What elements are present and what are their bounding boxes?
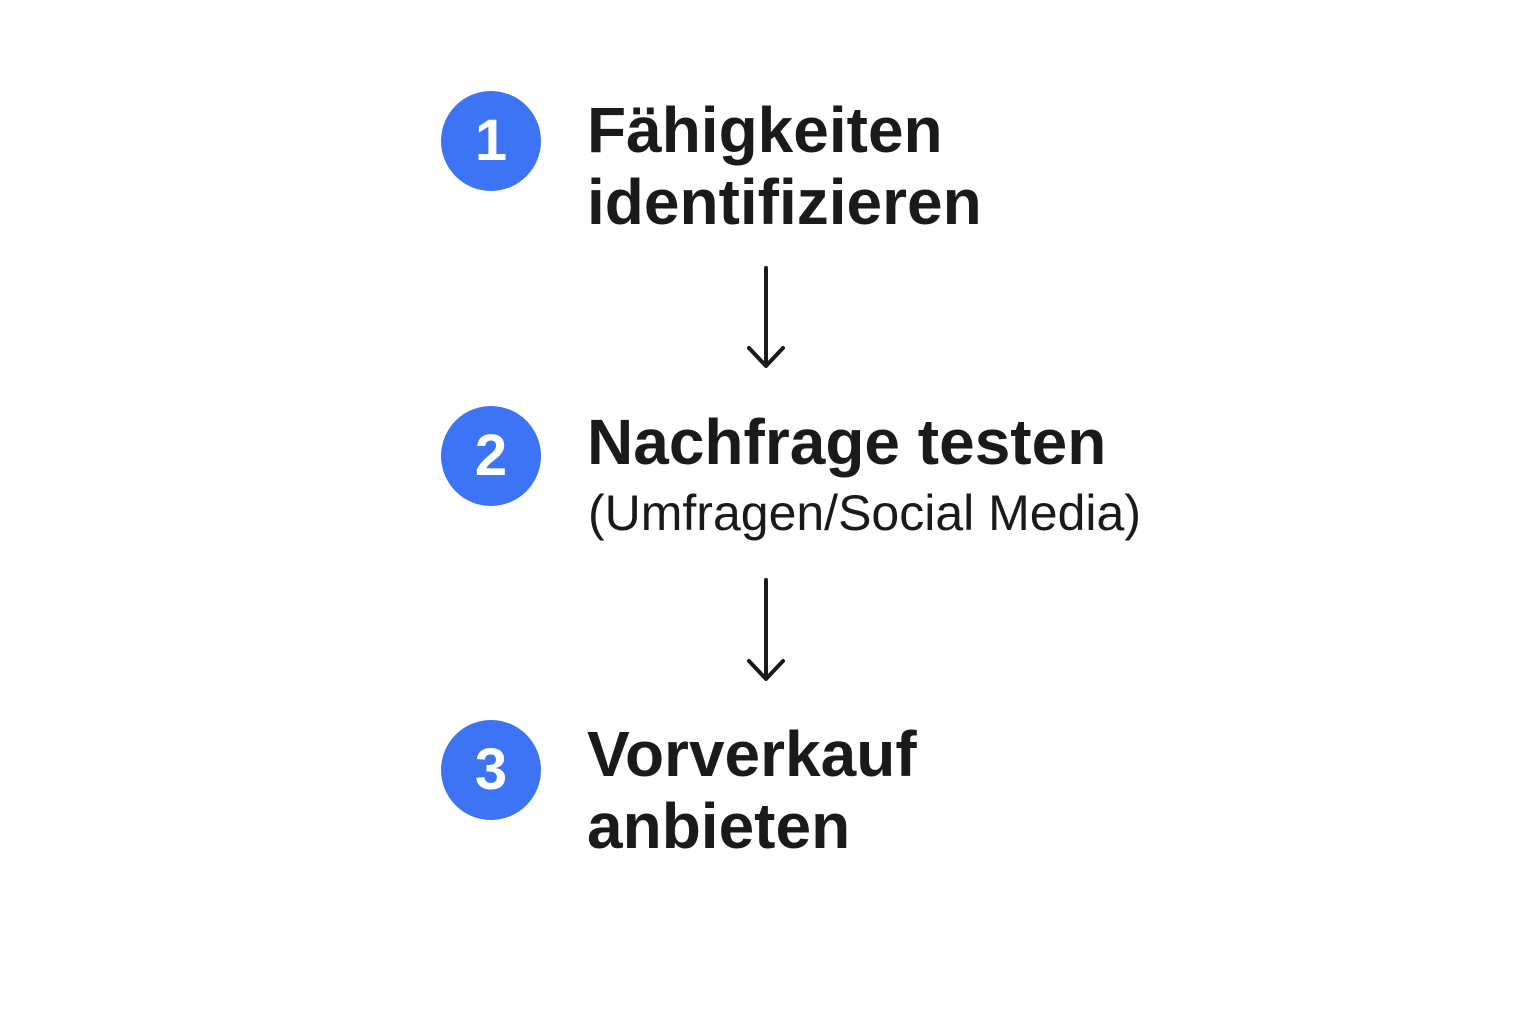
circle 3: 3 bbox=[475, 737, 507, 802]
circle 1 bbox=[441, 91, 541, 191]
circle 3 bbox=[441, 720, 541, 820]
circle 1: 1 bbox=[475, 108, 507, 173]
title 3 bbox=[587, 718, 917, 862]
title 2: Nachfrage testen bbox=[587, 406, 1106, 478]
title 3: Vorverkauf bbox=[587, 718, 917, 790]
step 3 bbox=[441, 718, 917, 862]
title 1 bbox=[587, 94, 982, 238]
title 1: identifizieren bbox=[587, 166, 982, 238]
title 1: Fähigkeiten bbox=[587, 94, 943, 166]
subtitle 2: (Umfragen/Social Media) bbox=[588, 485, 1141, 541]
step 2 bbox=[441, 406, 1141, 541]
circle 2 bbox=[441, 406, 541, 506]
step 1 bbox=[441, 91, 982, 238]
circle 2: 2 bbox=[475, 423, 507, 488]
title 3: anbieten bbox=[587, 790, 850, 862]
